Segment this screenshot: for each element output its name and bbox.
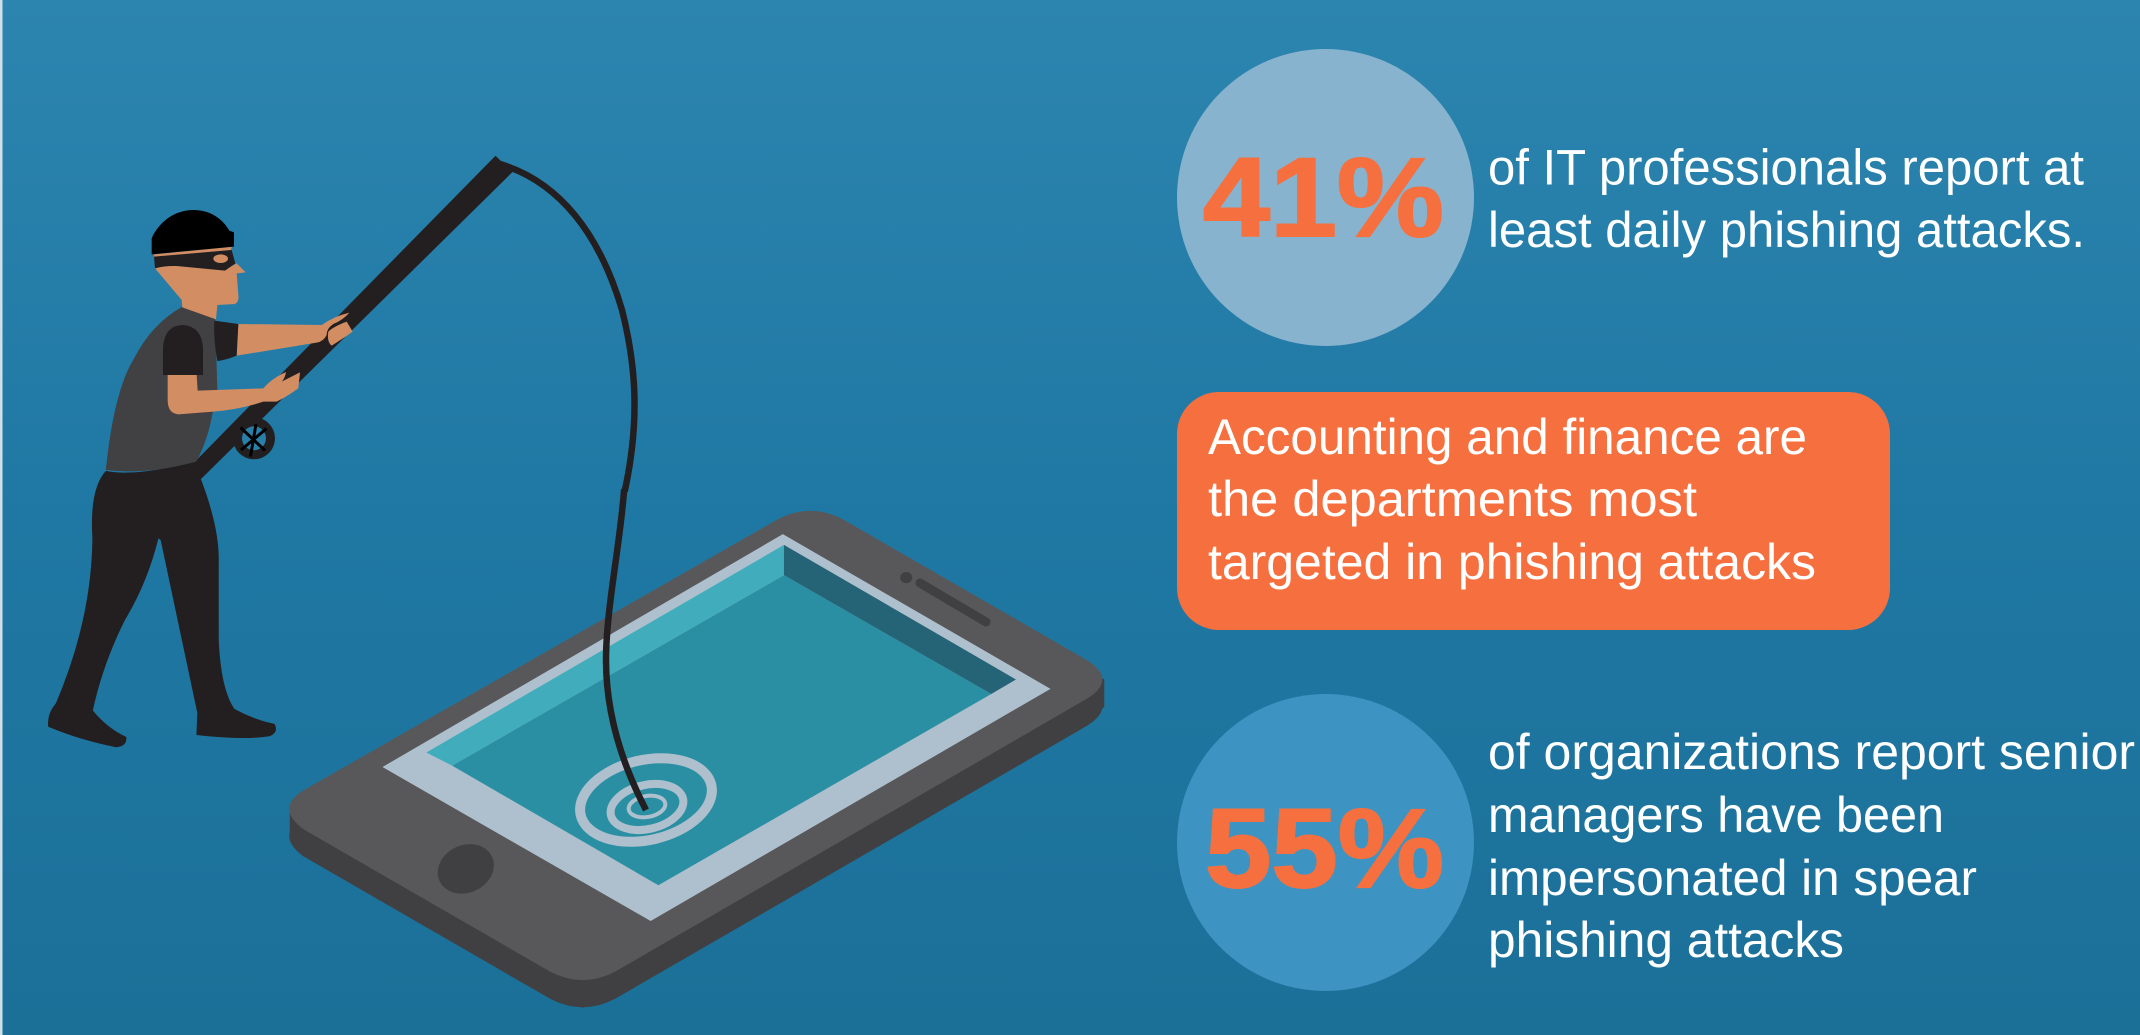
face (155, 263, 246, 319)
text: 41% description: least daily phishing attacks. (1488, 202, 2085, 258)
number: 41%: 41% (1203, 135, 1444, 260)
eye (213, 254, 228, 263)
callout box (1177, 392, 1890, 630)
text: 55% description: impersonated in spear (1488, 850, 1977, 906)
number: 55%: 55% (1205, 786, 1444, 911)
camera (900, 572, 912, 583)
thief body (48, 307, 276, 747)
near sleeve (163, 325, 203, 375)
screen left wall (426, 545, 784, 766)
beanie (152, 210, 234, 254)
mask (154, 250, 235, 271)
screen right wall (784, 545, 1016, 694)
shirt (106, 307, 217, 471)
callout text (1208, 409, 1816, 590)
ripples (572, 746, 720, 854)
illustration: phone (289, 511, 1104, 1008)
screen frame (382, 534, 1051, 921)
speaker (920, 583, 986, 622)
phone top face (289, 511, 1102, 980)
stat: 55% (1177, 694, 1474, 991)
far fist (328, 322, 353, 346)
screen floor (452, 575, 991, 885)
text: 55% description: managers have been (1488, 787, 1944, 843)
far sleeve (214, 321, 238, 361)
home button (431, 841, 501, 897)
callout text: Accounting and finance are (1208, 409, 1807, 465)
reel (233, 417, 275, 459)
forehead band (154, 247, 232, 257)
stat: 41% (1177, 49, 1474, 346)
callout: accounting and finance (1177, 392, 1890, 630)
callout text: the departments most (1208, 471, 1697, 527)
circle: 41% (1177, 49, 1474, 346)
text: 41% description: of IT professionals report at (1488, 140, 2084, 196)
circle: 55% (1177, 694, 1474, 991)
near arm (168, 372, 300, 414)
far arm (237, 313, 349, 356)
callout text: targeted in phishing attacks (1208, 534, 1816, 590)
text: 41% description (1488, 140, 2085, 258)
fishing line (500, 164, 646, 810)
text: 55% description: phishing attacks (1488, 912, 1844, 968)
text: 55% description (1488, 724, 2135, 968)
pants (48, 461, 276, 747)
phone side edge (289, 511, 1104, 1008)
thief upper body details (152, 210, 353, 414)
text: 55% description: of organizations report senior (1488, 724, 2135, 780)
illustration: fishing rod (175, 156, 512, 482)
